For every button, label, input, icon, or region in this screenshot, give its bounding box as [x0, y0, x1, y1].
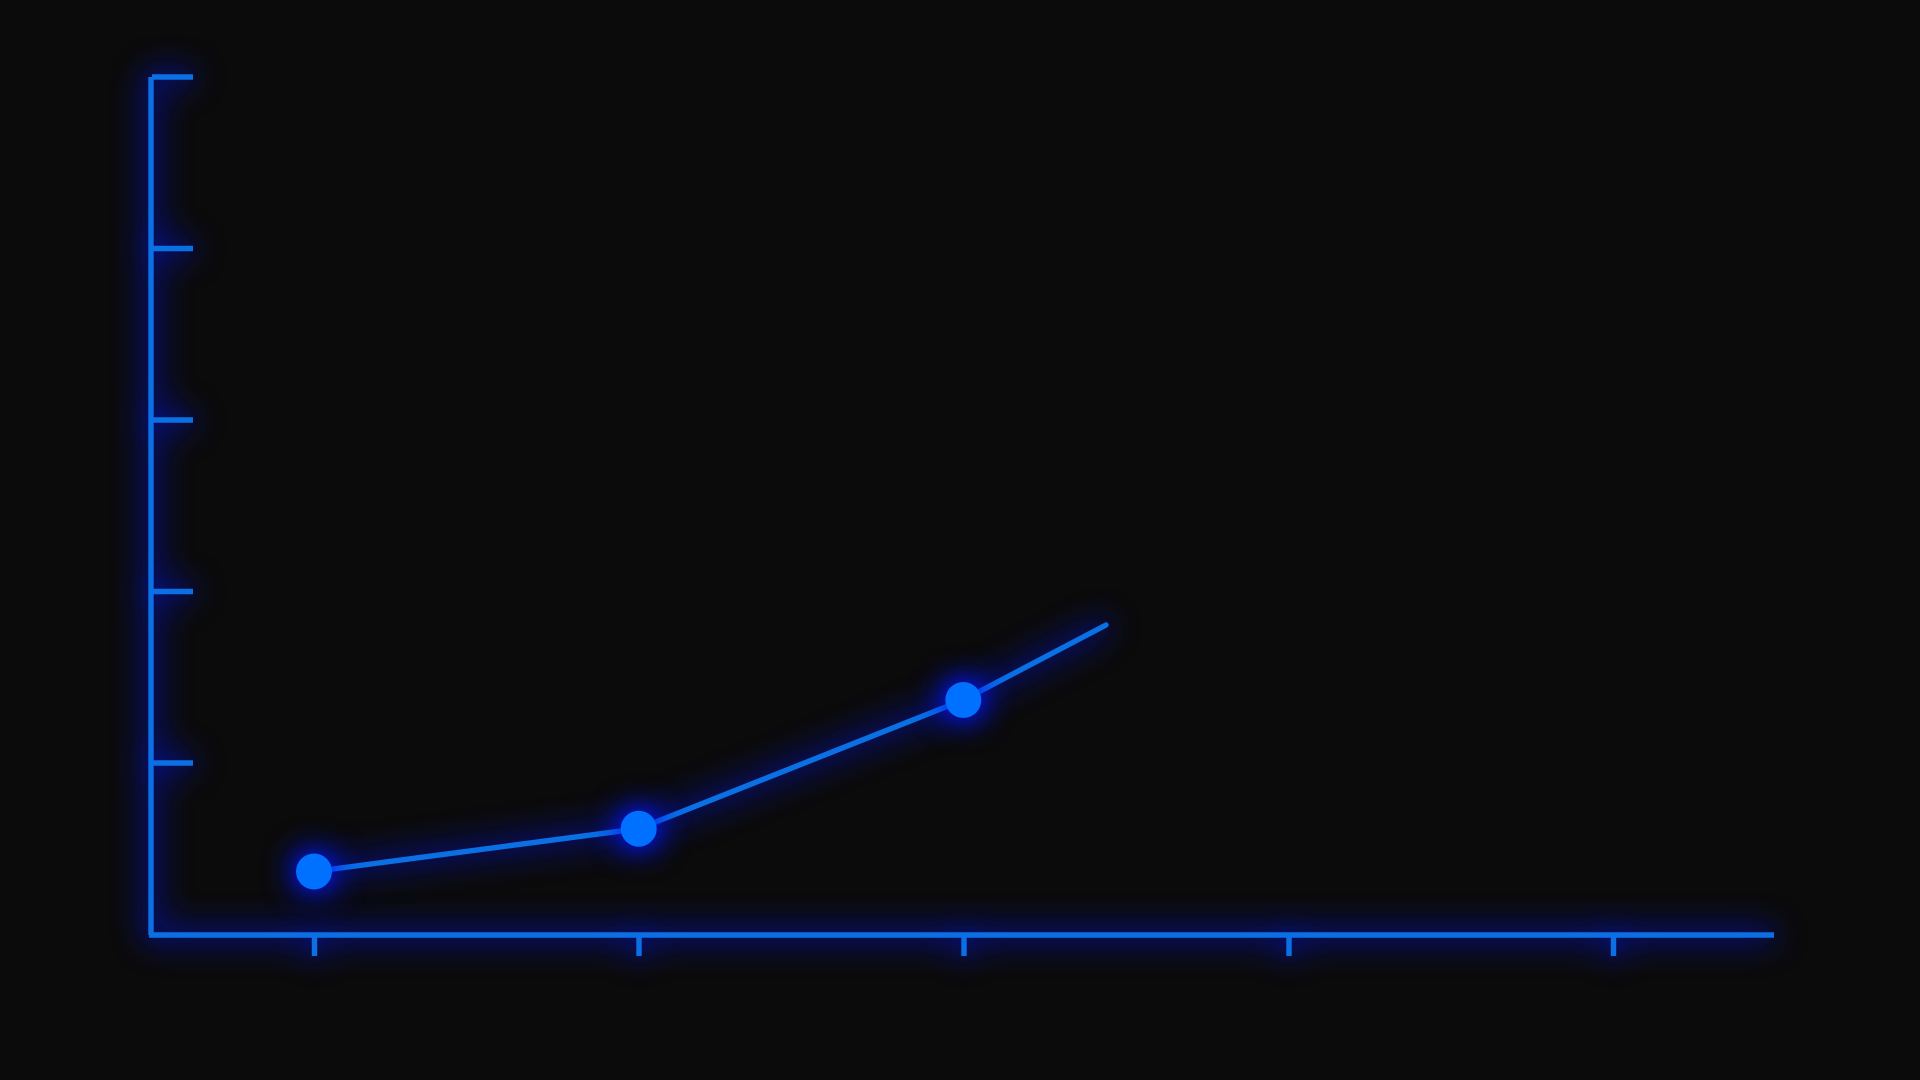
- y axis: [148, 77, 154, 935]
- point 1: [296, 854, 332, 890]
- point 2: [621, 811, 657, 847]
- data line: [314, 625, 1106, 872]
- x axis ticks: [314, 937, 1614, 956]
- axes: [149, 77, 1774, 956]
- y axis ticks: [152, 77, 193, 763]
- x axis: [149, 932, 1774, 938]
- point 3: [945, 682, 981, 718]
- data points: [296, 682, 981, 890]
